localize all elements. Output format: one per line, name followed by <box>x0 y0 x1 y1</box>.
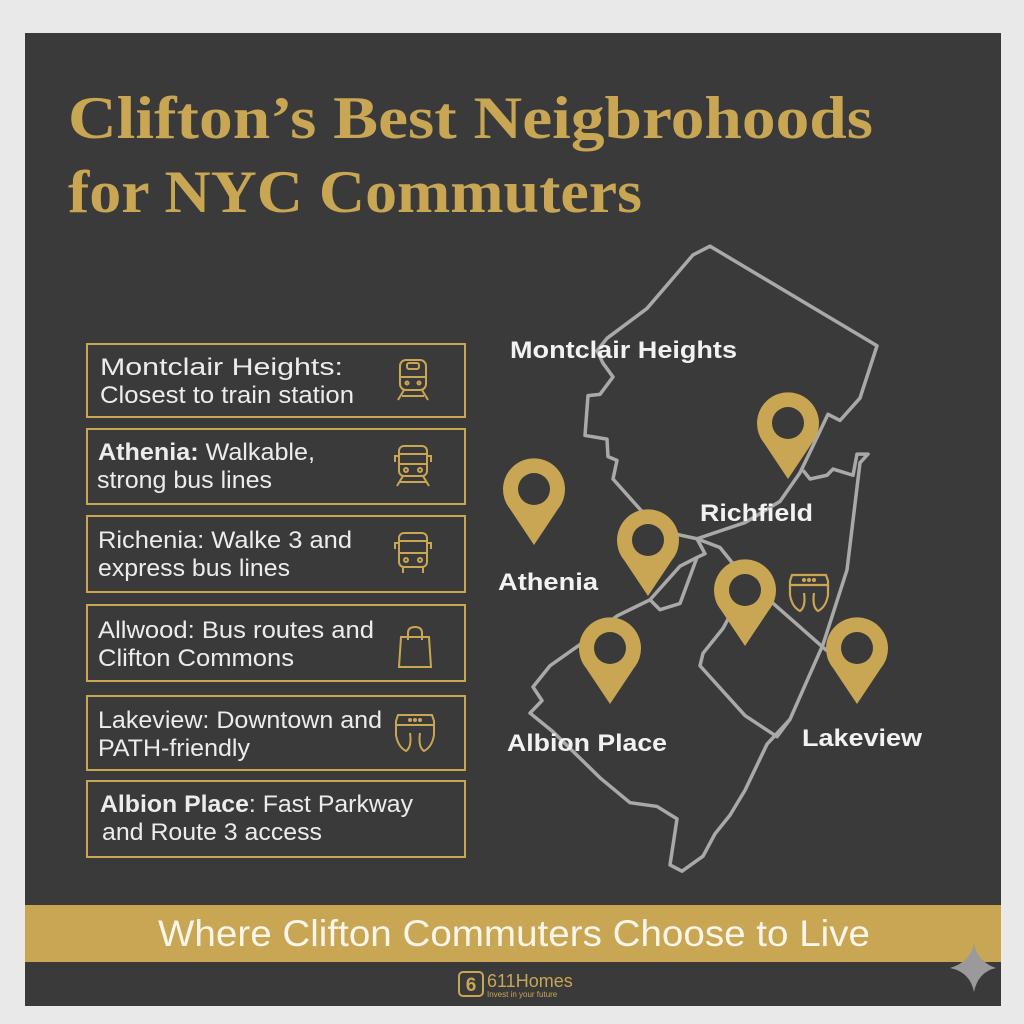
panel: Allwood <box>87 605 465 681</box>
banner: Where Clifton Commuters Choose to Live <box>158 913 870 954</box>
map labels: Athenia <box>498 569 599 596</box>
map labels: Lakeview <box>802 725 922 752</box>
map labels <box>498 337 922 757</box>
map outline <box>530 246 877 871</box>
panel: Athenia: strong bus lines <box>97 467 272 494</box>
panel: Lakeview: Lakeview: Downtown and <box>98 707 382 734</box>
map labels: Montclair Heights <box>510 337 737 364</box>
title: for NYC Commuters <box>68 159 642 225</box>
panel: Richenia: express bus lines <box>98 555 290 582</box>
logo: 611Homes <box>487 971 573 991</box>
panel: Montclair Heights: Montclair Heights: <box>100 354 343 381</box>
icon: map subway <box>790 575 828 611</box>
panel: Lakeview: PATH-friendly <box>98 735 250 762</box>
map labels: Albion Place <box>507 730 667 757</box>
panel: Albion Place <box>87 781 465 857</box>
panel: Richenia: Richenia: Walke 3 and <box>98 527 352 554</box>
logo: Invest in your future <box>487 990 558 999</box>
panel: Allwood: Allwood: Bus routes and <box>98 617 374 644</box>
title: Clifton’s Best Neigbrohoods <box>68 85 873 151</box>
panel: Allwood: Clifton Commons <box>98 645 294 672</box>
panel: Lakeview <box>87 696 465 770</box>
logo <box>459 971 573 999</box>
title <box>68 85 873 225</box>
panel: Albion Place: and Route 3 access <box>102 819 322 846</box>
list panels <box>87 344 465 857</box>
panel: Athenia: Athenia: Walkable, <box>98 439 315 466</box>
logo: 6 <box>466 975 476 996</box>
panel: Montclair Heights: Closest to train station <box>100 382 354 409</box>
pins <box>503 392 888 704</box>
map labels: Richfield <box>700 500 813 527</box>
icon: sparkle <box>950 944 996 992</box>
panel: Albion Place: Albion Place: Fast Parkway <box>100 791 413 818</box>
banner <box>25 905 1001 962</box>
panel: Athenia <box>87 429 465 504</box>
panel: Richenia <box>87 516 465 592</box>
panel: Montclair Heights <box>87 344 465 417</box>
